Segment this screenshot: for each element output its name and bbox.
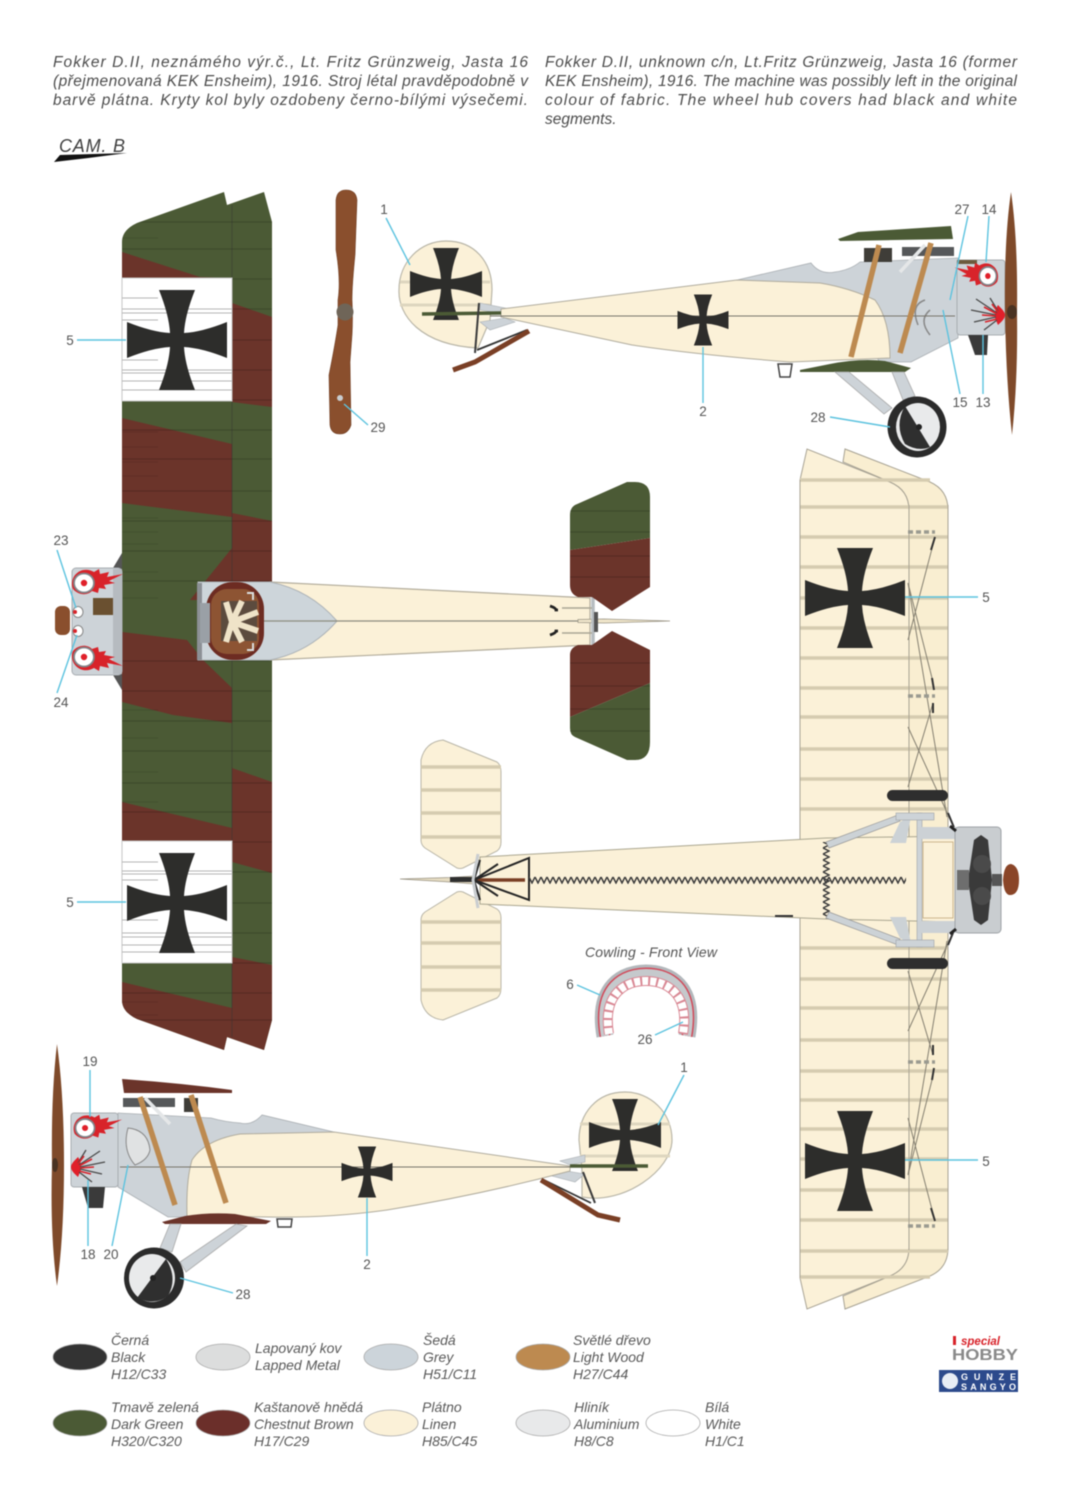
left view: callouts: 2 (363, 1257, 371, 1272)
right view: callouts: 27 (954, 202, 970, 217)
right view: upper wing (838, 226, 953, 241)
left view: callouts: 19 (82, 1054, 98, 1069)
caption: Czech description: Fokker D.II, neznámého výr.č., Lt. Fritz Grünzweig, Jasta 16 (53, 54, 528, 71)
top view: elevators (570, 482, 650, 760)
left view: upper wing (122, 1079, 232, 1093)
logo: Gunze Sangyo: SANGYO (961, 1382, 1016, 1392)
swatch: aluminium: Hliník (574, 1399, 610, 1415)
callouts: 5 on underside: 5 (982, 1154, 990, 1169)
swatch: chestnut brown (196, 1399, 363, 1449)
callouts: 23 and 24 (53, 533, 77, 710)
heading: cowling front view: Cowling - Front View (585, 944, 718, 960)
callouts: 23 and 24: 24 (53, 695, 69, 710)
callouts: 6 and 26: 26 (637, 1032, 653, 1047)
left view: tailplane (541, 1166, 648, 1220)
swatch: linen: Plátno (422, 1399, 462, 1415)
caption: Czech description: barvě plátna. Kryty kol byly ozdobeny černo-bílými výsečemi. (53, 92, 528, 109)
top view: white cross panels (122, 278, 232, 963)
swatch: white: H1/C1 (705, 1433, 745, 1449)
swatch: light wood: Light Wood (573, 1349, 645, 1365)
caption: Czech description (53, 54, 529, 109)
swatch: chestnut brown: Kaštanově hnědá (254, 1399, 363, 1415)
caption: English description: KEK Ensheim), 1916. The machine was possibly left in the original (545, 73, 1018, 90)
right view: linen fuselage (501, 280, 890, 362)
callouts: 5 on underside (905, 590, 990, 1169)
caption: English description: colour of fabric. The wheel hub covers had black and white (545, 92, 1017, 109)
right view: cross (678, 294, 728, 346)
callout: 29 (344, 404, 386, 435)
swatch: grey: Šedá (423, 1332, 456, 1348)
left view: grey forward fuselage (118, 1113, 334, 1217)
left view: guns and details (123, 1098, 198, 1165)
left view: tail stub (277, 1219, 292, 1227)
right view: callouts (380, 202, 997, 427)
underside view: cowling and engine (918, 826, 1002, 934)
left view: cross (342, 1146, 392, 1198)
right view: callouts: 2 (699, 404, 707, 419)
swatch: grey (364, 1332, 477, 1382)
top view: wing crosses (127, 290, 227, 953)
underside view: bracing wires (908, 532, 955, 1226)
swatch: grey: H51/C11 (423, 1366, 477, 1382)
top view: cowling with eyes (72, 553, 123, 690)
top view: cockpit (200, 582, 264, 660)
right view: tail stub fairings (480, 303, 515, 330)
left view: callouts: 18 (80, 1247, 96, 1262)
left view: undercarriage (160, 1224, 247, 1272)
right view: cowling (955, 260, 1005, 355)
right view: undercarriage (835, 372, 915, 414)
left view: lower wing (162, 1213, 271, 1224)
heading: CAM. B with swoosh (54, 136, 127, 162)
underside view: tailplane (421, 740, 501, 1020)
logo: Gunze Sangyo: GUNZE (961, 1372, 1016, 1382)
swatch: linen: H85/C45 (422, 1433, 477, 1449)
left view: callouts: 20 (103, 1247, 119, 1262)
left side view aircraft (52, 1044, 688, 1308)
callout: 29: 29 (370, 420, 386, 435)
logo: Special Hobby: HOBBY (952, 1347, 1018, 1364)
left view: tail stub fairings (552, 1155, 585, 1182)
right view: callouts: 1 (380, 202, 388, 217)
logo: Gunze Sangyo (939, 1370, 1018, 1392)
top view: upper wing with camouflage (122, 192, 272, 1060)
underside view: undercarriage and wheels (826, 790, 948, 969)
swatch: aluminium (516, 1399, 640, 1449)
right view: tailplane (422, 303, 529, 370)
left view: linen fuselage (187, 1132, 570, 1217)
swatch: dark green (53, 1399, 199, 1449)
swatch: light wood: H27/C44 (573, 1366, 628, 1382)
top view: fuselage (197, 582, 670, 660)
right view: lower wing (800, 360, 911, 372)
swatch: black: H12/C33 (111, 1366, 166, 1382)
callouts: 5 on wing: 5 (66, 895, 74, 910)
right view: grey forward fuselage (737, 258, 958, 362)
callouts: 5 on wing: 5 (66, 333, 74, 348)
cowling front view (566, 944, 718, 1047)
right view: rudder circle (399, 241, 492, 348)
underside view: fuselage (400, 836, 958, 922)
right side view aircraft (380, 192, 1017, 458)
right view: callouts: 13 (975, 395, 991, 410)
caption: English description (545, 54, 1018, 128)
underside view: propeller hub (1003, 864, 1019, 895)
swatch: dark green: Dark Green (111, 1416, 184, 1432)
caption: English description: Fokker D.II, unknown c/n, Lt.Fritz Grünzweig, Jasta 16 (former (545, 54, 1018, 71)
swatch: chestnut brown: H17/C29 (254, 1433, 309, 1449)
swatch: lapped metal: Lapped Metal (255, 1357, 341, 1373)
right view: tail stub (778, 364, 792, 377)
left view: callouts: 28 (235, 1287, 251, 1302)
swatch: white (646, 1399, 745, 1449)
left view: cowling (71, 1113, 122, 1208)
callouts: 6 and 26: 6 (566, 977, 574, 992)
underside view: wing (800, 449, 948, 1309)
caption: English description: segments. (545, 111, 617, 128)
heading: CAM. B with swoosh: CAM. B (59, 136, 125, 156)
propeller: top view blade (329, 190, 357, 434)
callouts: 6 and 26 (566, 977, 683, 1047)
logo: Special Hobby: special (961, 1336, 1001, 1348)
swatch: lapped metal (196, 1340, 342, 1373)
right view: guns and top decking (864, 245, 954, 335)
logo: Special Hobby (952, 1336, 1018, 1364)
swatch: aluminium: H8/C8 (574, 1433, 614, 1449)
callouts: 5 on wing (66, 333, 126, 910)
swatch: light wood (516, 1332, 651, 1382)
swatch: linen (364, 1399, 477, 1449)
right view: callouts: 14 (981, 202, 997, 217)
swatch: dark green: H320/C320 (111, 1433, 182, 1449)
swatch: light wood: Světlé dřevo (573, 1332, 651, 1348)
left view: callouts: 1 (680, 1060, 688, 1075)
swatch: dark green: Tmavě zelená (111, 1399, 199, 1415)
right view: wood struts (851, 243, 931, 357)
underside view: wing crosses (805, 548, 905, 1211)
left view: callouts (80, 1054, 688, 1302)
left view: rudder circle (579, 1092, 672, 1198)
left view: wood struts (140, 1095, 226, 1205)
right view: propeller (1005, 192, 1017, 435)
top view: propeller hub (55, 606, 70, 635)
callouts: 5 on underside: 5 (982, 590, 990, 605)
caption: Czech description: (přejmenovaná KEK Ensheim), 1916. Stroj létal pravděpodobně v (53, 73, 529, 90)
swatch: black: Černá (111, 1332, 149, 1348)
right view: wheel (888, 396, 946, 458)
right view: callouts: 28 (810, 410, 826, 425)
swatch: linen: Linen (422, 1416, 456, 1432)
legend: colour key (53, 1332, 745, 1449)
left view: propeller (52, 1044, 64, 1286)
swatch: white: Bílá (705, 1399, 729, 1415)
swatch: grey: Grey (423, 1349, 454, 1365)
swatch: black: Black (111, 1349, 146, 1365)
right view: callouts: 15 (952, 395, 968, 410)
swatch: lapped metal: Lapovaný kov (255, 1340, 342, 1356)
left view: wheel (124, 1248, 184, 1308)
swatch: aluminium: Aluminium (573, 1416, 640, 1432)
swatch: white: White (705, 1416, 741, 1432)
swatch: chestnut brown: Chestnut Brown (254, 1416, 354, 1432)
callouts: 23 and 24: 23 (53, 533, 69, 548)
swatch: black (53, 1332, 166, 1382)
